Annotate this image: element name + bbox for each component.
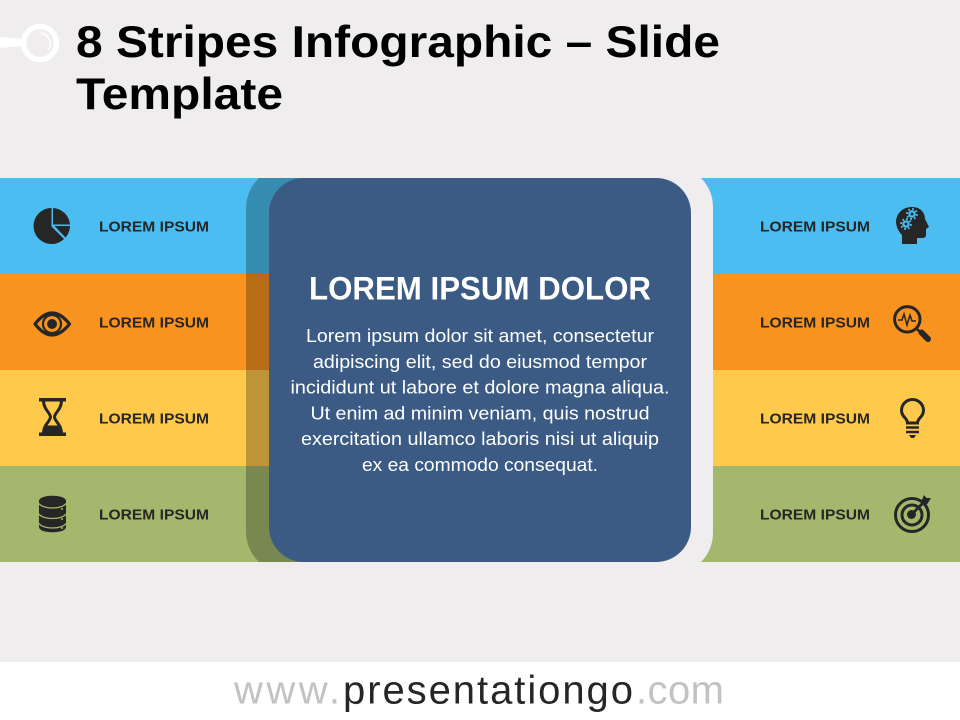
- icon: head with gears: [896, 207, 929, 244]
- card body text: [290, 325, 670, 475]
- title: [76, 18, 720, 119]
- title: 8 Stripes Infographic – Slide: [76, 18, 720, 67]
- left labels: LOREM IPSUM: [99, 410, 209, 428]
- right labels: LOREM IPSUM: [760, 218, 870, 236]
- stripes: [0, 178, 960, 562]
- panel: center card: [269, 178, 691, 562]
- right labels: [760, 218, 870, 524]
- left labels: LOREM IPSUM: [99, 218, 209, 236]
- left labels: [99, 218, 209, 524]
- card heading: LOREM IPSUM DOLOR: [309, 270, 651, 306]
- icon: pie chart: [34, 208, 70, 244]
- left labels: LOREM IPSUM: [99, 506, 209, 524]
- card body text: adipiscing elit, sed do eiusmod tempor: [313, 351, 647, 372]
- footer url: www.: [233, 668, 340, 712]
- icon: pin ornament: [0, 26, 56, 60]
- right labels: LOREM IPSUM: [760, 410, 870, 428]
- card body text: exercitation ullamco laboris nisi ut aliquip: [301, 428, 659, 449]
- right labels: LOREM IPSUM: [760, 506, 870, 524]
- footer url: presentationgo: [343, 668, 633, 712]
- footer band: [0, 662, 960, 720]
- card body text: ex ea commodo consequat.: [362, 454, 598, 475]
- footer url: .com: [636, 668, 724, 712]
- icon: magnifier with pulse: [895, 307, 928, 339]
- icon: hourglass: [39, 398, 66, 436]
- icon: eye: [35, 313, 70, 335]
- left labels: LOREM IPSUM: [99, 314, 209, 332]
- icon: light bulb: [902, 400, 924, 438]
- card body text: Ut enim ad minim veniam, quis nostrud: [310, 402, 650, 423]
- title: Template: [76, 70, 283, 119]
- card body text: incididunt ut labore et dolore magna aliqua.: [290, 377, 670, 398]
- right labels: LOREM IPSUM: [760, 314, 870, 332]
- icon: target with arrow: [896, 495, 931, 532]
- footer url: [233, 668, 724, 712]
- dark left overlay: [246, 178, 400, 562]
- light right band: [500, 178, 713, 562]
- icon: database: [39, 496, 66, 532]
- card body text: Lorem ipsum dolor sit amet, consectetur: [306, 325, 654, 346]
